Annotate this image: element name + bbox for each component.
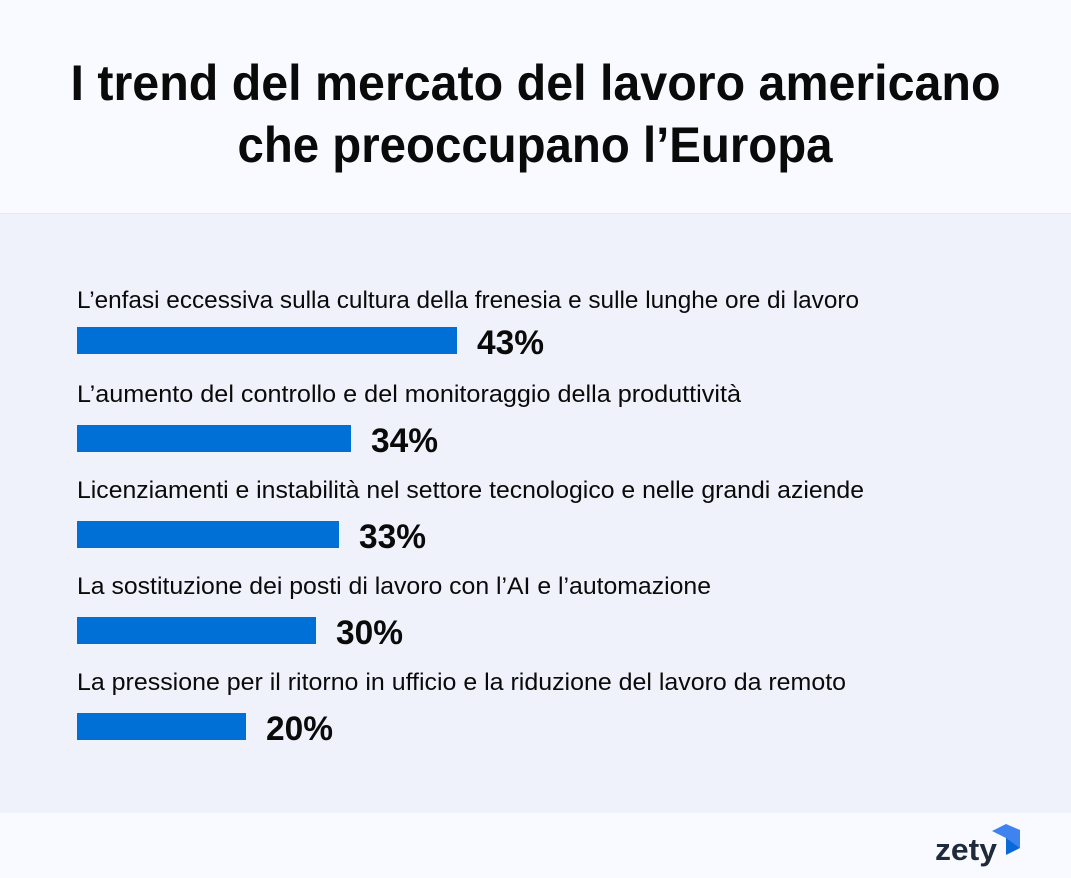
row 2: bar	[77, 425, 351, 452]
title: che preoccupano l’Europa	[238, 117, 834, 173]
row 5: value: 20%	[266, 710, 333, 748]
panel: chart background	[0, 213, 1071, 813]
row 1: value: 43%	[477, 324, 544, 362]
row 3: label: Licenziamenti e instabilità nel settore tecnologico e nelle grandi aziende	[77, 477, 864, 504]
row 5: label: La pressione per il ritorno in ufficio e la riduzione del lavoro da remoto	[77, 669, 846, 696]
title: I trend del mercato del lavoro americano	[70, 55, 1000, 111]
row 1: label: L’enfasi eccessiva sulla cultura della frenesia e sulle lunghe ore di lavoro	[77, 287, 859, 314]
row 2: value: 34%	[371, 422, 438, 460]
bar chart	[77, 287, 864, 748]
icon: logo mark	[992, 824, 1020, 855]
row 4: value: 30%	[336, 614, 403, 652]
row 2: label: L’aumento del controllo e del monitoraggio della produttività	[77, 381, 742, 408]
row 4: bar	[77, 617, 316, 644]
logo: zety: zety	[935, 832, 998, 867]
row 3: bar	[77, 521, 339, 548]
title	[70, 55, 1000, 173]
row 5: bar	[77, 713, 246, 740]
row 1: bar	[77, 327, 457, 354]
logo: zety	[935, 824, 1020, 867]
row 4: label: La sostituzione dei posti di lavoro con l’AI e l’automazione	[77, 573, 711, 600]
row 3: value: 33%	[359, 518, 426, 556]
